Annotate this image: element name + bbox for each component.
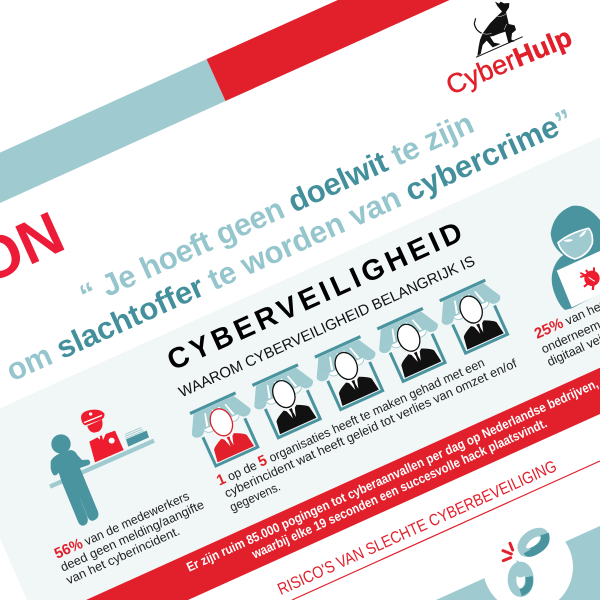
text: 25% statistic: [532, 296, 600, 369]
teal lower panel: [436, 526, 600, 600]
text: 1 op de 5 statistic: cyberincident wat heeft geleid tot verlies van omzet en/of: [222, 356, 519, 500]
reporting person: [51, 434, 98, 526]
icon: hacker with laptop: [551, 206, 600, 310]
top band: red: [207, 0, 450, 101]
heading: CYBERVEILIGHEID: [163, 216, 467, 377]
quote line 2: om slachtoffer te worden van cybercrime”: [1, 102, 578, 388]
red band text: waarbij elke 19 seconden een succesvolle hack plaatsvindt.: [249, 415, 549, 562]
top band: light teal: [0, 59, 226, 203]
desk: [50, 441, 154, 487]
quote line 1: “ Je hoeft geen doelwit te zijn: [74, 105, 479, 313]
text: 1 op de 5 statistic: gegevens.: [228, 480, 283, 515]
red band: [86, 368, 600, 600]
icon: store with black person 3: [308, 332, 391, 415]
heading rule: [292, 461, 600, 600]
logo: dog: [474, 2, 523, 57]
icon: broken chain: [503, 528, 549, 593]
files: [125, 427, 149, 447]
icon: store with red person: [183, 389, 267, 471]
subheading: WAAROM CYBERVEILIGHEID BELANGRIJK IS: [176, 253, 478, 401]
icon: store with black person 2: [245, 360, 329, 443]
icon: desk, officer and reporting person: [50, 410, 154, 526]
icon: store with black person 4: [370, 304, 454, 386]
section heading: risico's: RISICO'S VAN SLECHTE CYBERBEVEILIGING: [275, 457, 560, 599]
text: 56% statistic: van het cyberincident.: [64, 524, 182, 587]
logo: CyberHulp wordmark: CyberHulp: [442, 22, 576, 101]
white circle behind chain: [483, 522, 573, 600]
text: 1 op de 5 statistic: 1 op de 5 organisaties heeft te maken gehad met een: [214, 354, 487, 489]
icon: store with black person 5: [433, 276, 516, 358]
panel: light background: [0, 137, 600, 600]
text: 56% statistic: deed geen melding/aangifte: [58, 498, 206, 575]
text: 56% statistic: [52, 483, 212, 587]
text: 56% statistic: 56% van de medewerkers: [52, 487, 192, 563]
officer: [81, 410, 124, 462]
